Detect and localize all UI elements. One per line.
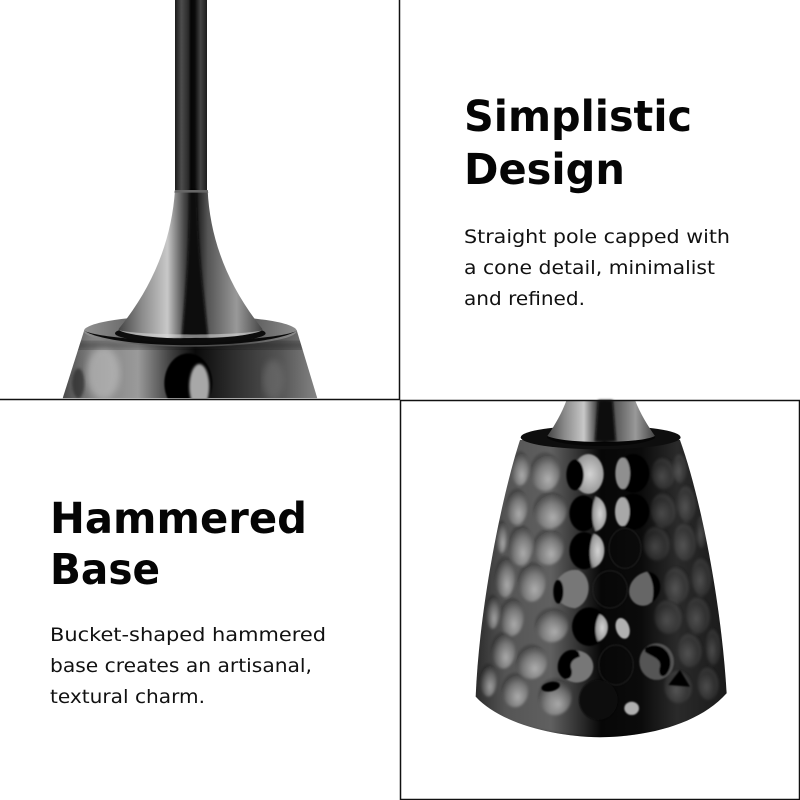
body text: hammered base: Bucket-shaped hammered <box>50 624 326 646</box>
cone base <box>547 400 655 446</box>
body text: hammered base: base creates an artisanal, <box>50 655 312 677</box>
panel border: top-left <box>0 0 400 400</box>
dark central facets <box>593 528 641 685</box>
body text: simplistic design: a cone detail, minimalist <box>464 257 715 279</box>
heading: Hammered Base <box>50 494 307 595</box>
body text: hammered base <box>50 624 326 708</box>
panel: pole and cone photo <box>60 0 320 413</box>
body text: simplistic design: and refined. <box>464 288 585 310</box>
heading: Simplistic Design: Design <box>464 145 625 195</box>
body text: hammered base: textural charm. <box>50 686 205 708</box>
body text: simplistic design <box>464 226 730 310</box>
disc top <box>521 425 681 449</box>
heading: Simplistic Design <box>464 92 692 195</box>
image: lamp base with cone detail <box>60 190 320 413</box>
text block: simplistic design <box>464 92 730 310</box>
panel border: bottom-right <box>400 400 800 800</box>
panel: hammered base photo <box>473 400 727 740</box>
image: pole <box>175 0 207 191</box>
heading: Hammered Base: Base <box>50 545 160 595</box>
image: hammered bucket base <box>473 400 727 740</box>
bright half-moon reflections <box>541 454 690 715</box>
body text: simplistic design: Straight pole capped with <box>464 226 730 248</box>
heading: Simplistic Design: Simplistic <box>464 92 692 142</box>
heading: Hammered Base: Hammered <box>50 494 307 544</box>
text block: hammered base <box>50 494 326 708</box>
